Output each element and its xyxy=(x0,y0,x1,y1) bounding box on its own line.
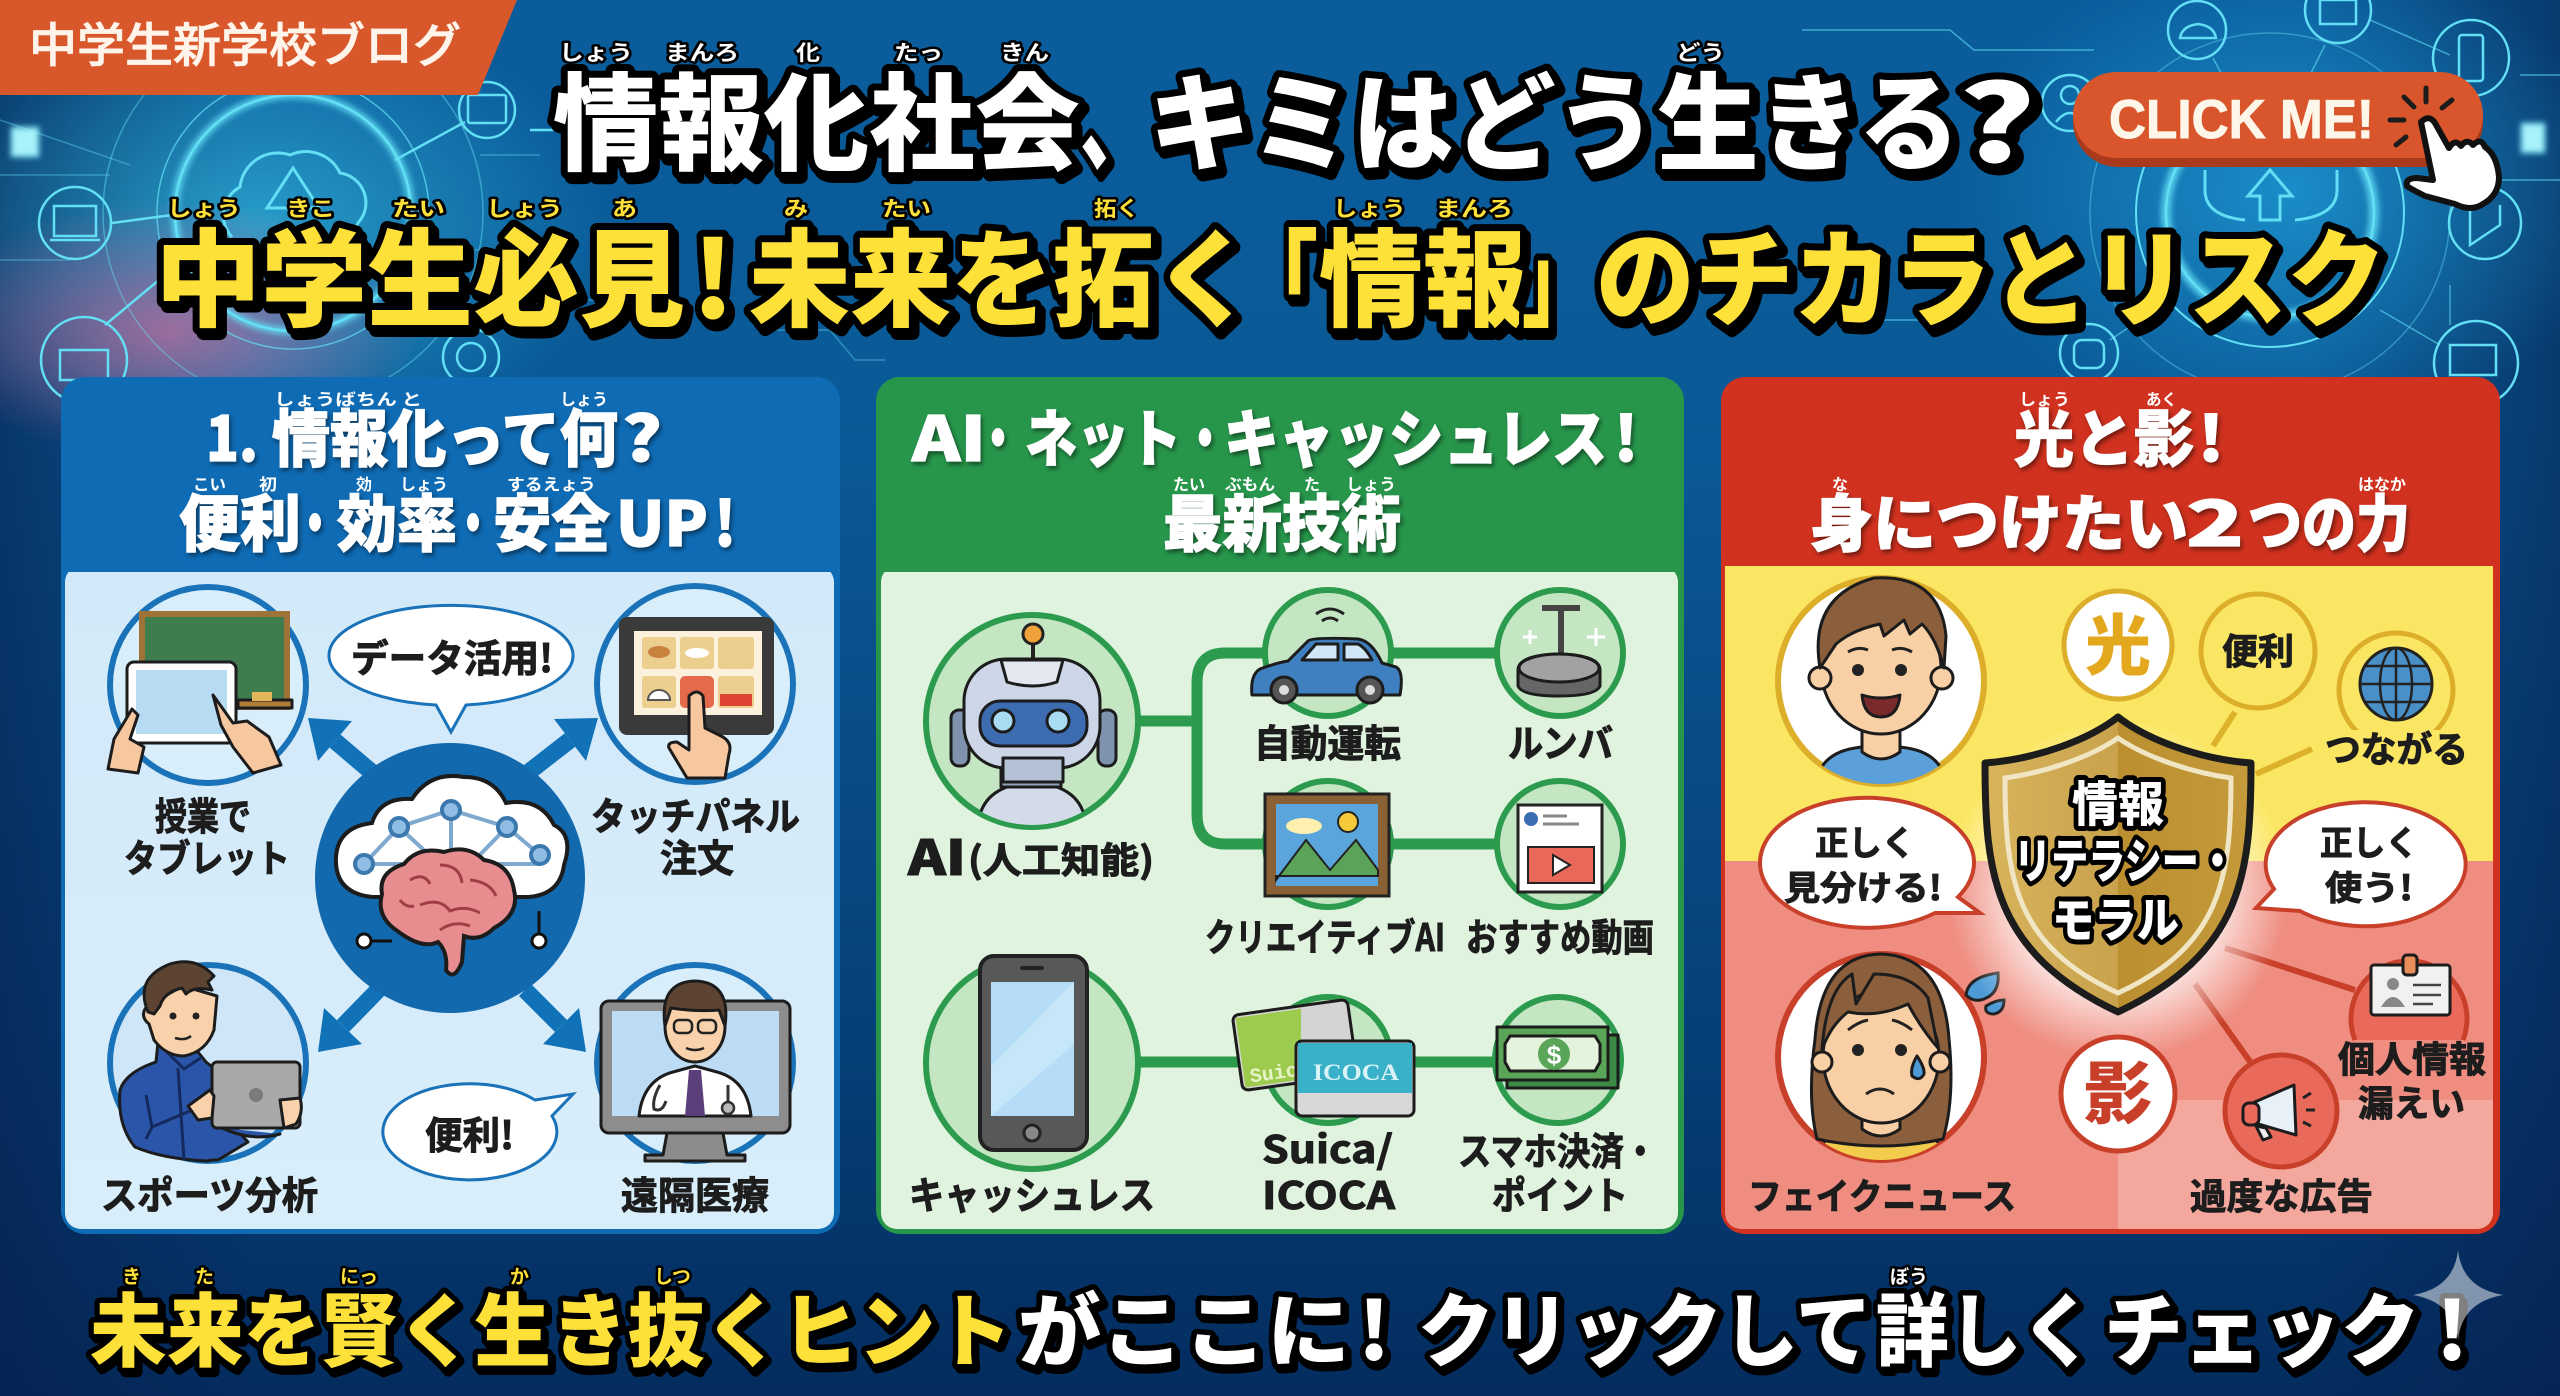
heading: UP xyxy=(616,474,708,564)
heading: ・ xyxy=(295,474,335,564)
heading: た xyxy=(1304,471,1320,495)
corner banner xyxy=(0,0,517,95)
title line 2: 」 xyxy=(1522,195,1594,349)
heading: ・ xyxy=(977,389,1019,479)
title line 1: キミはどう生きる xyxy=(1149,39,1960,193)
heading: ・ xyxy=(453,474,493,564)
title line 2 xyxy=(155,195,2386,349)
icon: cash xyxy=(1495,997,1621,1123)
icon: worried girl xyxy=(1778,954,1984,1170)
heading: 情報化って何 xyxy=(272,389,618,479)
title line 1 furigana xyxy=(559,37,1725,67)
title line 2 furigana xyxy=(167,193,1513,223)
title line 2 furigana: 拓く xyxy=(1094,193,1139,223)
title line 1 furigana: どう xyxy=(1676,37,1725,67)
title line 2 furigana: たい xyxy=(392,193,445,223)
footer message: がここに xyxy=(1018,1268,1350,1384)
footer message: ! xyxy=(2436,1268,2468,1384)
title line 2 furigana: たい xyxy=(882,193,931,223)
heading: つの力 xyxy=(2248,474,2410,564)
item: connected globe: つながる xyxy=(2325,721,2468,773)
callout: data use: データ活用! xyxy=(351,628,553,683)
title line 2: 「 xyxy=(1238,195,1318,349)
icon: recommended video xyxy=(1497,781,1623,907)
labels: スポーツ分析 xyxy=(101,1165,318,1220)
labels: (人工知能) xyxy=(968,832,1154,884)
heading: ! xyxy=(1614,389,1638,479)
labels xyxy=(1748,1031,2486,1220)
item: touch panel xyxy=(597,586,793,782)
labels: AI xyxy=(907,819,966,889)
footer furigana: にっ xyxy=(340,1262,378,1289)
icon: pointer hand xyxy=(2407,118,2499,208)
callout: use correctly: 正しく xyxy=(2320,816,2418,865)
labels: Suica/ xyxy=(1262,1119,1393,1174)
heading: あく xyxy=(2146,386,2177,410)
heading xyxy=(179,386,736,564)
badge: shadow xyxy=(2061,1037,2175,1151)
shield: モラル xyxy=(2052,881,2179,951)
item: connected globe xyxy=(2325,633,2468,773)
heading: しょう xyxy=(400,471,448,495)
labels: 過度な広告 xyxy=(2190,1168,2373,1220)
icon: sparkle watermark xyxy=(2413,1250,2503,1340)
shield: リテラシー・ xyxy=(2014,822,2236,892)
labels: おすすめ動画 xyxy=(1466,907,1654,962)
icon: robot vacuum xyxy=(1497,590,1623,716)
callout: convenient xyxy=(383,1084,573,1180)
icon: IC cards xyxy=(1232,997,1414,1123)
labels: 注文 xyxy=(660,828,734,883)
item: sports player xyxy=(110,962,306,1161)
title line 1 furigana: たっ xyxy=(894,37,943,67)
heading: ネット xyxy=(1025,389,1181,479)
footer message: ! xyxy=(1358,1268,1390,1384)
footer message: 詳しく xyxy=(1876,1268,2094,1384)
callout: data use xyxy=(329,605,573,732)
labels: 自動運転 xyxy=(1254,713,1401,768)
heading: 身につけたい xyxy=(1810,474,2188,564)
heading: 初 xyxy=(259,471,277,495)
icon: cash: $ xyxy=(1547,1040,1562,1070)
connector lines xyxy=(1139,653,1560,1062)
footer furigana: しつ xyxy=(654,1262,691,1289)
panel: latest technology xyxy=(876,377,1684,1234)
title line 1 furigana: まんろ xyxy=(665,37,739,67)
heading: するえょう xyxy=(507,471,596,495)
arrows from hub xyxy=(308,718,598,1052)
title line 1 furigana: きん xyxy=(1000,37,1049,67)
heading: 効 xyxy=(356,471,372,495)
footer furigana: き xyxy=(122,1262,141,1289)
panel: information society xyxy=(61,377,840,1234)
heading: 効率 xyxy=(337,474,457,564)
callout: use correctly xyxy=(2256,802,2466,926)
connector lines xyxy=(2195,712,2355,1063)
heading xyxy=(1810,386,2410,564)
callout: use correctly: 使う! xyxy=(2325,861,2413,910)
labels: ルンバ xyxy=(1508,713,1613,768)
heading: ? xyxy=(622,389,662,479)
icon: IC cards: Suica xyxy=(1249,1058,1311,1089)
footer furigana: た xyxy=(195,1262,214,1289)
hub: cloud and brain xyxy=(315,743,585,1013)
labels xyxy=(101,786,800,1220)
icon: robot xyxy=(926,615,1138,830)
title line 2 furigana: まんろ xyxy=(1435,193,1513,223)
footer message: クリックして xyxy=(1418,1268,1872,1384)
heading: しょう xyxy=(2019,386,2070,410)
title line 2 furigana: きこ xyxy=(286,193,335,223)
footer message: 未来を賢く生き抜くヒント xyxy=(90,1268,1012,1384)
icon: IC cards: ICOCA xyxy=(1313,1060,1399,1085)
callout: convenient: 便利! xyxy=(425,1105,514,1160)
title line 1 furigana: 化 xyxy=(796,37,820,67)
heading: 最新技術 xyxy=(1163,474,1401,564)
labels: キャッシュレス xyxy=(909,1165,1155,1220)
callout: discern correctly xyxy=(1760,798,1980,928)
heading: な xyxy=(1832,471,1848,495)
item: convenient: 便利 xyxy=(2222,623,2294,675)
panel: light and shadow xyxy=(1721,377,2500,1234)
footer message xyxy=(90,1268,2468,1384)
labels: 漏えい xyxy=(2358,1075,2465,1127)
icon: smartphone xyxy=(926,956,1138,1169)
item: remote medicine xyxy=(597,965,793,1161)
neon network right xyxy=(1802,0,2560,405)
title line 2: 情報 xyxy=(1319,195,1527,349)
title line 2 furigana: しょう xyxy=(486,193,563,223)
badge: light xyxy=(2064,591,2172,699)
footer furigana xyxy=(122,1262,1928,1289)
heading: しょうばちん と xyxy=(274,386,422,410)
footer furigana: か xyxy=(510,1262,529,1289)
title line 1 xyxy=(553,39,2036,193)
title line 2: ! xyxy=(692,195,734,349)
heading: ぶもん xyxy=(1225,471,1275,495)
heading: たい xyxy=(1173,471,1205,495)
title line 2: のチカラとリスク xyxy=(1596,195,2386,349)
labels xyxy=(907,713,1657,1220)
title line 2: 中学生必見 xyxy=(155,195,685,349)
neon network left xyxy=(0,23,1060,403)
labels: 授業で xyxy=(155,786,251,841)
labels: ICOCA xyxy=(1262,1165,1396,1220)
labels: ポイント xyxy=(1492,1165,1628,1220)
icon: megaphone xyxy=(2225,1055,2337,1167)
shield xyxy=(1948,717,2288,1060)
badge: shadow: 影 xyxy=(2084,1039,2152,1138)
shield: 情報 xyxy=(2072,765,2164,835)
heading: はなか xyxy=(2358,471,2406,495)
heading: 1. xyxy=(206,389,258,479)
labels: タッチパネル xyxy=(591,786,800,841)
icon: picture frame xyxy=(1265,781,1391,907)
callout: discern correctly: 正しく xyxy=(1815,816,1915,865)
heading: ! xyxy=(2198,389,2224,479)
icon: sweat drops xyxy=(1966,973,2004,1014)
title line 2 furigana: み xyxy=(784,193,808,223)
heading: ! xyxy=(714,474,736,564)
icon: personal ID xyxy=(2351,955,2467,1040)
footer furigana: ぼう xyxy=(1890,1262,1928,1289)
click me button: CLICK ME! xyxy=(2109,88,2374,150)
title line 1 furigana: しょう xyxy=(559,37,633,67)
heading: 2 xyxy=(2186,474,2244,564)
title line 1: ? xyxy=(1958,39,2036,193)
item: tablet class xyxy=(108,587,306,783)
title line 2: 未来を拓く xyxy=(749,195,1255,349)
icon: click burst xyxy=(2390,88,2452,145)
heading: 便利 xyxy=(179,474,301,564)
title line 2 furigana: しょう xyxy=(1333,193,1406,223)
labels: フェイクニュース xyxy=(1748,1168,2016,1220)
heading: 安全 xyxy=(493,474,610,564)
icon: self driving car xyxy=(1252,590,1401,716)
heading: ・ xyxy=(1184,389,1226,479)
heading xyxy=(911,389,1638,564)
labels: 個人情報 xyxy=(2338,1031,2486,1083)
heading: しょう xyxy=(1346,471,1396,495)
heading: こい xyxy=(193,471,226,495)
heading: 光と影 xyxy=(2014,389,2194,479)
callout: discern correctly: 見分ける! xyxy=(1784,861,1942,910)
labels: タブレット xyxy=(124,828,290,883)
title line 1: 、 xyxy=(1080,39,1150,193)
icon: smiling boy xyxy=(1778,578,1984,790)
click me button xyxy=(2073,72,2499,208)
title line 2 furigana: あ xyxy=(612,193,637,223)
labels: クリエイティブAI xyxy=(1205,907,1445,962)
item: convenient xyxy=(2201,594,2315,708)
heading: しょう xyxy=(560,386,608,410)
labels: スマホ決済・ xyxy=(1458,1121,1657,1176)
heading: キャッシュレス xyxy=(1224,389,1607,479)
title line 1: 情報化社会 xyxy=(553,39,1080,193)
badge: light: 光 xyxy=(2085,593,2151,689)
title line 2 furigana: しょう xyxy=(167,193,241,223)
heading: AI xyxy=(911,389,986,479)
labels: 遠隔医療 xyxy=(621,1165,769,1220)
corner banner: 中学生新学校ブログ xyxy=(29,7,461,76)
footer message: チェック xyxy=(2104,1268,2420,1384)
